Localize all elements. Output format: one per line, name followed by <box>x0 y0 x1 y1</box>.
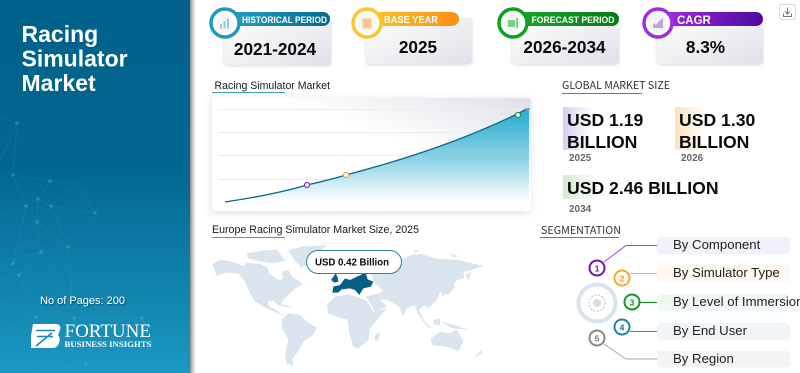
line chart <box>212 98 531 211</box>
segment 2: by simulator type: 2 <box>620 274 625 284</box>
segment 4: by end user: 4 <box>620 322 625 332</box>
segment 5: by region: 5 <box>595 334 600 344</box>
title: Market <box>22 70 96 96</box>
title: Racing <box>22 21 98 47</box>
callout: market value <box>306 250 402 274</box>
segment 2: by simulator type <box>614 265 790 286</box>
market value: 2026: USD 1.30 <box>679 110 755 130</box>
logo: Fortune Business Insights: BUSINESS INSIGHTS <box>64 339 152 349</box>
stat card: historical period <box>211 9 331 65</box>
heading: segmentation: SEGMENTATION <box>541 222 621 238</box>
segment 1: by component <box>590 237 790 276</box>
market value: 2025: USD 1.19 <box>567 110 643 130</box>
market value: 2026 <box>675 107 755 164</box>
segment 1: by component: By Component <box>673 237 761 252</box>
segment 3: by level of immersion <box>624 294 800 311</box>
callout: market value: USD 0.42 Billion <box>315 256 389 268</box>
stat card: CAGR: CAGR <box>677 15 712 27</box>
market value: 2034 <box>563 175 719 215</box>
heading: europe market size: Europe Racing Simulator Market Size, 2025 <box>212 224 419 236</box>
logo: Fortune Business Insights <box>31 321 152 349</box>
stat card: CAGR <box>644 9 763 64</box>
segment 3: by level of immersion: By Level of Immersion <box>673 294 800 309</box>
market value: 2026: 2026 <box>681 153 704 164</box>
market value: 2025 <box>563 107 643 164</box>
world map <box>210 245 483 366</box>
stat card: base year: BASE YEAR <box>384 15 439 26</box>
segment 1: by component: 1 <box>595 264 600 274</box>
logo: Fortune Business Insights: FORTUNE <box>64 321 151 342</box>
segment 4: by end user <box>614 320 790 340</box>
segmentation hub icon <box>578 284 616 322</box>
heading: racing simulator market: Racing Simulator Market <box>214 80 330 92</box>
market value: 2025: 2025 <box>569 153 592 164</box>
panel: sidebar <box>0 0 196 373</box>
segment 5: by region <box>590 330 790 368</box>
page count: No of Pages: 200 <box>40 295 125 307</box>
stat card: historical period: 2021-2024 <box>234 39 317 59</box>
market value: 2034: 2034 <box>569 204 592 215</box>
heading: global market size: GLOBAL MARKET SIZE <box>562 77 670 93</box>
market value: 2025: BILLION <box>567 132 637 152</box>
stat card: CAGR: 8.3% <box>686 37 725 57</box>
segment 2: by simulator type: By Simulator Type <box>673 265 780 280</box>
segment 5: by region: By Region <box>673 351 734 366</box>
market value: 2026: BILLION <box>679 132 749 152</box>
stat card: base year <box>353 9 472 64</box>
stat card: forecast period: FORECAST PERIOD <box>532 15 615 26</box>
stat card: forecast period: 2026-2034 <box>523 37 606 57</box>
market value: 2034: USD 2.46 BILLION <box>567 178 719 198</box>
segment 4: by end user: By End User <box>673 323 748 338</box>
stat card: forecast period <box>499 9 619 64</box>
segment 3: by level of immersion: 3 <box>630 298 635 308</box>
title: Simulator <box>22 46 128 72</box>
stat card: historical period: HISTORICAL PERIOD <box>242 15 327 26</box>
stat card: base year: 2025 <box>399 37 438 57</box>
icon: download button <box>780 4 796 20</box>
